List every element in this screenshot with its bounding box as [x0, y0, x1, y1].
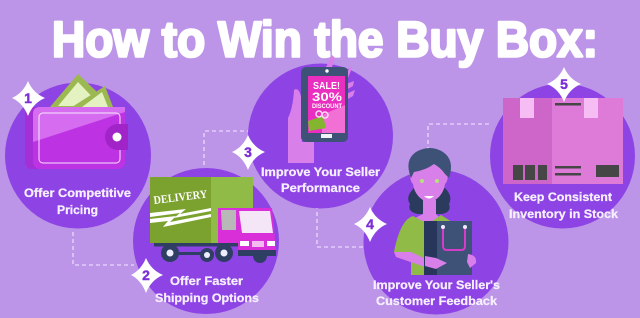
label: offer competitive pricing: Pricing [57, 203, 98, 217]
label: improve your seller performance: Improve Your Seller [261, 165, 380, 179]
badge: number 1 [12, 81, 45, 116]
label: offer competitive pricing: Offer Competitive [24, 186, 131, 200]
label: improve your seller's customer feedback: Improve Your Seller's [373, 278, 500, 292]
icon: hand holding phone: SALE! [313, 81, 340, 92]
icon: woman holding shopping bag [394, 148, 476, 275]
icon: hand holding phone [288, 55, 355, 163]
label: offer faster shipping options [155, 274, 259, 305]
label: improve your seller performance [261, 165, 380, 195]
panel: step 2 faster shipping [131, 168, 279, 314]
icon: wallet with bills [25, 74, 128, 169]
connector: step 3 to step 4 [317, 205, 364, 247]
label: offer competitive pricing [24, 186, 131, 217]
badge: number 2 [131, 258, 163, 293]
icon: delivery truck [150, 177, 276, 263]
label: improve your seller performance: Performance [281, 181, 360, 195]
label: keep consistent inventory in stock: Keep Consistent [514, 190, 612, 204]
panel: step 5 consistent inventory [490, 67, 635, 228]
connector: step 2 to step 3 [204, 131, 248, 172]
panel: step 3 seller performance [232, 55, 393, 208]
badge: number 5 [547, 67, 581, 102]
badge: number 5: 5 [560, 76, 568, 92]
label: keep consistent inventory in stock: Inventory in Stock [509, 207, 618, 221]
label: offer faster shipping options: Offer Faster [170, 274, 243, 288]
icon: hand holding phone: 30% [312, 90, 342, 104]
panel: step 4 customer feedback [354, 148, 508, 314]
badge: number 4 [354, 207, 387, 242]
badge: number 2: 2 [142, 267, 150, 283]
label: improve your seller's customer feedback: Customer Feedback [376, 294, 497, 308]
badge: number 3 [232, 135, 265, 170]
badge: number 4: 4 [366, 216, 374, 232]
connector: step 1 to step 2 [73, 232, 134, 265]
label: improve your seller's customer feedback [373, 278, 500, 308]
icon: delivery truck: DELIVERY [153, 188, 209, 207]
panel: step 1 competitive pricing [5, 74, 151, 228]
icon: hand holding phone: DISCOUNT [312, 104, 342, 110]
label: keep consistent inventory in stock [509, 190, 618, 221]
icon: cardboard box [503, 98, 623, 184]
label: offer faster shipping options: Shipping Options [155, 291, 259, 305]
badge: number 1: 1 [24, 90, 32, 106]
title: How to Win the Buy Box: [52, 12, 598, 68]
badge: number 3: 3 [244, 144, 252, 160]
connector: step 4 to step 5 [428, 124, 491, 165]
